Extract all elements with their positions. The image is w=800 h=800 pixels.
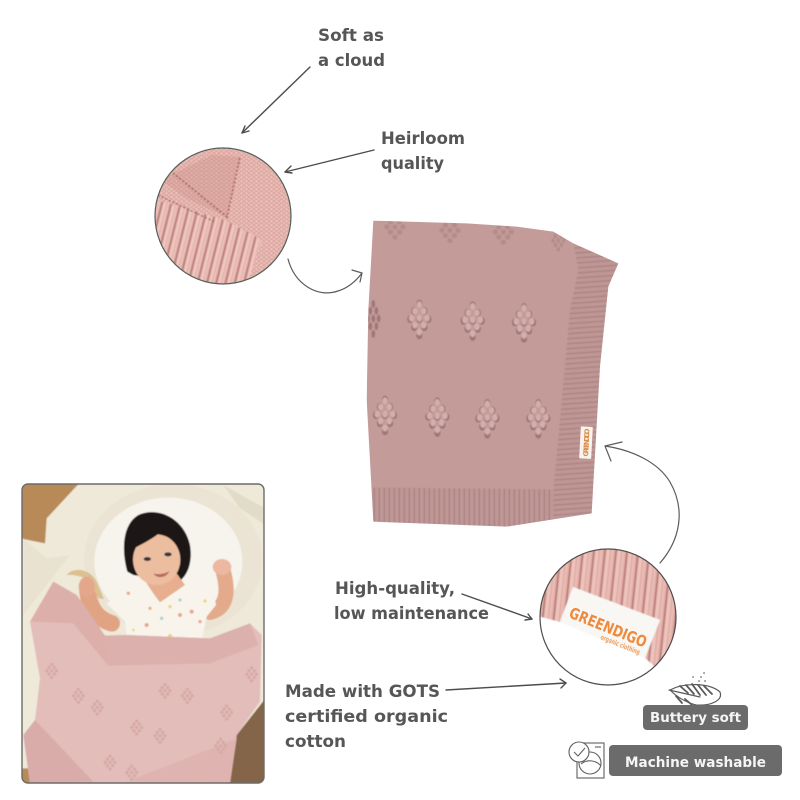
baby hands bbox=[78, 576, 95, 589]
folded pink knit blanket product photo: GREENDIGO bbox=[582, 428, 591, 457]
pill bbox=[609, 745, 782, 776]
arrow: High-quality to label swatch bbox=[462, 594, 532, 620]
label close-up swatch circle: GREENDIGO bbox=[567, 604, 649, 651]
pill bbox=[643, 705, 748, 730]
arrow: Soft as a cloud to swatch bbox=[242, 67, 310, 133]
baby face bbox=[133, 534, 180, 585]
callout: Made with GOTS certified organic cotton bbox=[285, 682, 448, 751]
callout: High-quality, low maintenance: High-quality, bbox=[335, 579, 455, 598]
top row of bobbles bbox=[384, 221, 566, 251]
lifestyle photo: baby under pink blanket bbox=[17, 478, 270, 788]
callout: Soft as a cloud: a cloud bbox=[318, 51, 385, 70]
bottom ribbed border bbox=[373, 488, 550, 526]
chest bbox=[147, 573, 185, 603]
callout: High-quality, low maintenance bbox=[334, 579, 489, 623]
callout: High-quality, low maintenance: low maintenance bbox=[334, 604, 489, 623]
knit texture swatch circle bbox=[150, 145, 295, 290]
feature: Machine washable bbox=[569, 742, 782, 778]
callout: Soft as a cloud: Soft as bbox=[318, 26, 384, 45]
blanket bobble motifs bbox=[45, 663, 258, 781]
callout: Soft as a cloud bbox=[318, 26, 385, 70]
label close-up swatch circle: organic clothing bbox=[599, 633, 641, 657]
held toy bbox=[67, 570, 104, 599]
folded pink knit blanket product photo bbox=[360, 213, 627, 533]
curved arrow: swatch to blanket bbox=[288, 259, 362, 293]
cream throw background bbox=[22, 484, 264, 768]
curved arrow: label swatch to blanket label bbox=[605, 442, 679, 563]
callout: Made with GOTS certified organic cotton: certified organic bbox=[285, 707, 448, 726]
lower row of bobbles bbox=[373, 396, 551, 439]
woven basket bbox=[84, 484, 263, 636]
feature: Machine washable: Machine washable bbox=[625, 755, 766, 771]
onesie bbox=[107, 587, 216, 638]
callout: Made with GOTS certified organic cotton: cotton bbox=[285, 732, 346, 751]
callout: Made with GOTS certified organic cotton: Made with GOTS bbox=[285, 682, 440, 701]
woven label bbox=[560, 587, 660, 658]
callout: Heirloom quality bbox=[381, 129, 465, 173]
callout: Heirloom quality: Heirloom bbox=[381, 129, 465, 148]
feature: Buttery soft: Buttery soft bbox=[650, 710, 742, 726]
baby arms bbox=[87, 590, 112, 623]
pink blanket over baby bbox=[30, 621, 262, 782]
confetti dots on onesie bbox=[127, 592, 207, 638]
right ribbed border bbox=[554, 246, 618, 516]
icon: washing machine with check bbox=[569, 742, 604, 778]
middle row of bobbles bbox=[366, 300, 536, 343]
arrow: Heirloom quality to swatch bbox=[285, 150, 374, 173]
blanket folds bbox=[105, 623, 258, 666]
throw shading bbox=[23, 538, 70, 615]
icon: feather bbox=[669, 673, 720, 705]
small sewn label bbox=[579, 426, 593, 459]
blanket body bbox=[366, 220, 582, 490]
arrow: GOTS to label swatch bbox=[446, 679, 566, 690]
label close-up swatch circle bbox=[539, 548, 677, 686]
callout: Heirloom quality: quality bbox=[381, 154, 444, 173]
wooden floor bbox=[22, 484, 78, 544]
feature: Buttery soft bbox=[643, 673, 748, 730]
baby hair bbox=[124, 512, 191, 582]
